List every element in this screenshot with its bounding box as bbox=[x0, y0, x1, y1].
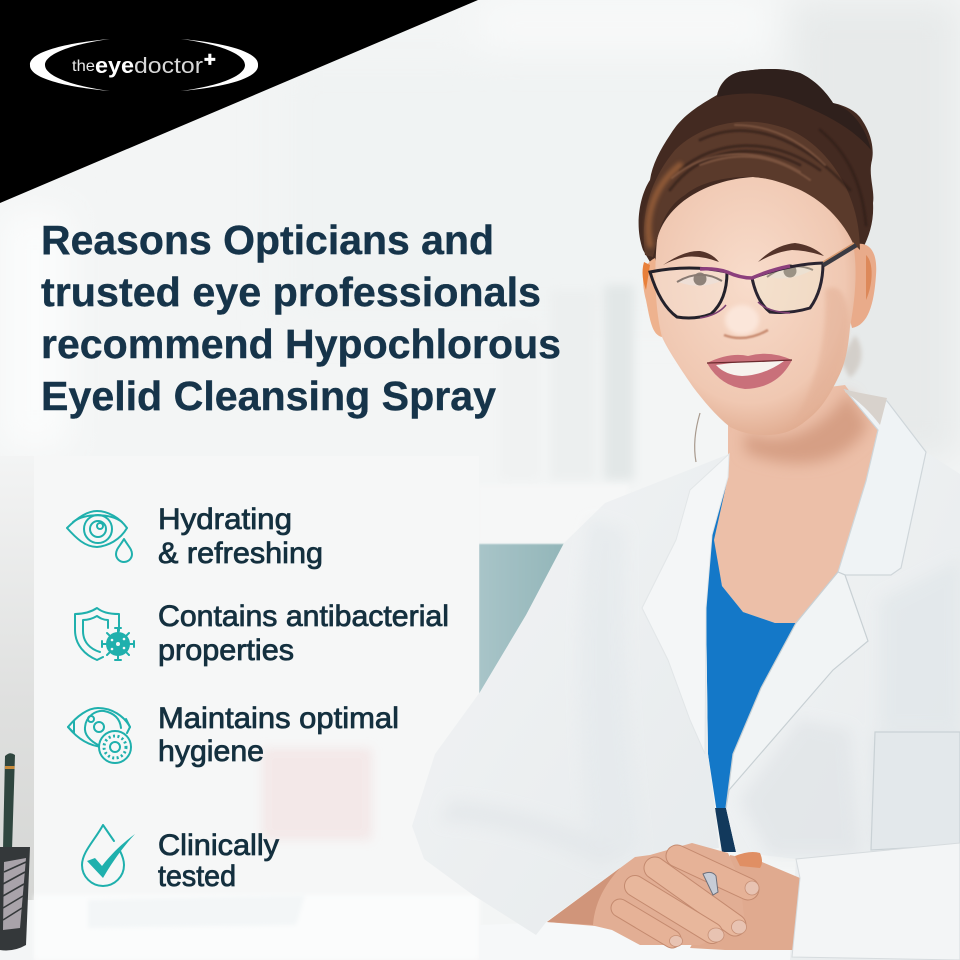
white coat, left side bbox=[412, 454, 729, 935]
logo: the eye doctor plus: + bbox=[204, 49, 216, 71]
text: contains antibacterial properties: Contains antibacterial bbox=[158, 600, 449, 633]
title: trusted eye professionals bbox=[41, 269, 541, 315]
text: maintains optimal hygiene: Maintains optimal bbox=[158, 702, 399, 735]
nose bbox=[724, 305, 768, 338]
neck and chest bbox=[712, 385, 878, 623]
text: clinically tested: Clinically bbox=[158, 829, 279, 862]
eyes bbox=[677, 264, 813, 286]
face bbox=[655, 177, 856, 435]
thumb behind bbox=[735, 852, 762, 868]
translucent benefits panel bbox=[34, 456, 479, 960]
desk paper bbox=[479, 922, 800, 960]
logo: the eye doctor plus: the bbox=[72, 58, 95, 75]
icon: shield with virus bbox=[75, 608, 134, 660]
icon: drop with check mark bbox=[82, 825, 135, 886]
text: hydrating and refreshing bbox=[158, 503, 323, 570]
hair at nape bbox=[840, 335, 861, 378]
coat shading folds bbox=[440, 520, 960, 866]
glasses bbox=[650, 243, 856, 318]
text: maintains optimal hygiene bbox=[158, 702, 399, 768]
bun, darker bbox=[717, 69, 871, 150]
hair mass bbox=[639, 69, 873, 262]
right sleeve cuff bbox=[792, 843, 960, 960]
finger nails bbox=[670, 881, 759, 946]
fingers bbox=[620, 856, 748, 939]
dark inner lining bbox=[715, 808, 736, 852]
shaded jaw bbox=[790, 287, 848, 428]
text: hydrating and refreshing: Hydrating bbox=[158, 503, 292, 536]
left wrist and hand bbox=[547, 843, 745, 945]
text: hydrating and refreshing: & refreshing bbox=[158, 537, 323, 570]
blue shirt bbox=[706, 477, 796, 826]
doctor in white coat bbox=[412, 69, 960, 960]
pen bbox=[703, 872, 718, 895]
front hair sweep bbox=[644, 122, 860, 257]
logo: the eye doctor plus: eye bbox=[95, 53, 134, 78]
stray hair bbox=[695, 413, 700, 462]
icon: eye with contact lens bbox=[68, 708, 131, 763]
smile bbox=[707, 354, 792, 389]
left lapel bbox=[642, 454, 729, 754]
coat pocket bbox=[871, 732, 960, 850]
title: Reasons Opticians and bbox=[41, 217, 494, 263]
pen holder on desk bbox=[0, 753, 30, 950]
icon: eye with tear drop bbox=[67, 511, 132, 562]
title: Eyelid Cleansing Spray bbox=[41, 373, 496, 419]
text: contains antibacterial properties: properties bbox=[158, 634, 294, 667]
title: recommend Hypochlorous bbox=[41, 321, 561, 367]
text: contains antibacterial properties bbox=[158, 600, 449, 667]
logo band: black corner triangle bbox=[0, 0, 478, 203]
text: clinically tested bbox=[158, 829, 279, 893]
text: clinically tested: tested bbox=[158, 860, 236, 893]
logo: the eye doctor plus: doctor bbox=[134, 53, 203, 78]
right hand below bbox=[690, 855, 800, 950]
white coat, right side bbox=[726, 430, 960, 960]
collar, right bbox=[838, 390, 926, 575]
text: maintains optimal hygiene: hygiene bbox=[158, 735, 264, 768]
ear left bbox=[643, 258, 668, 337]
title bbox=[41, 217, 561, 419]
logo: the eye doctor plus bbox=[30, 39, 258, 91]
eyebrows bbox=[663, 251, 719, 265]
hair streaks bbox=[648, 125, 866, 245]
ear right bbox=[845, 244, 876, 328]
right lapel bbox=[726, 572, 868, 808]
